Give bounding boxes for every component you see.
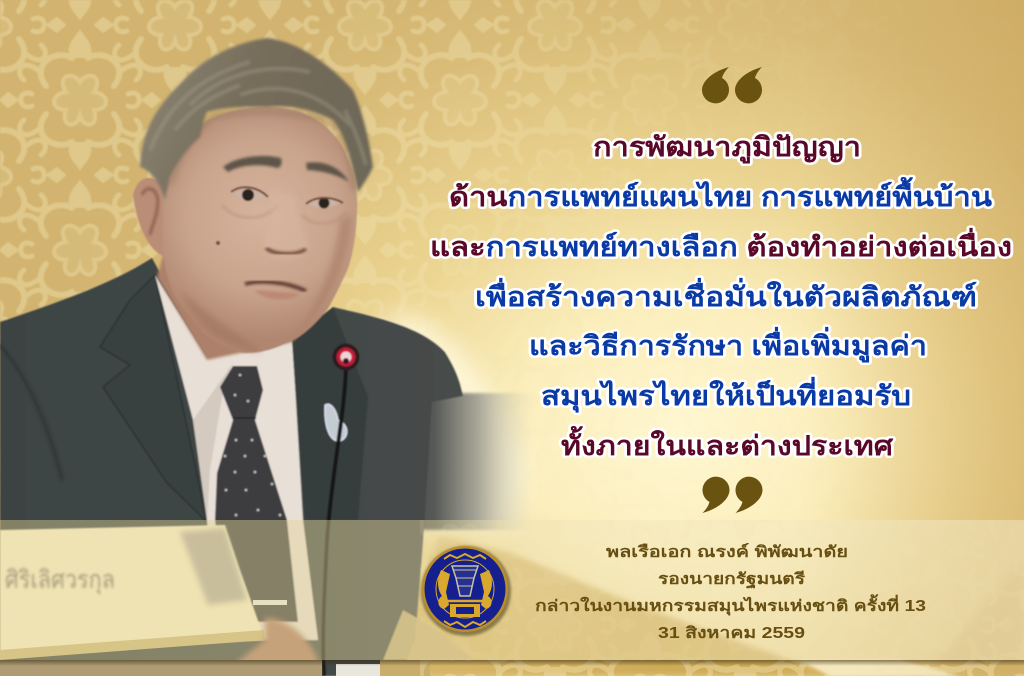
name card text: ศิริเลิศวรกุล — [5, 566, 115, 595]
strip beneath band — [0, 660, 1024, 676]
lower gold wedge behind band — [380, 535, 835, 676]
right eye — [306, 198, 343, 208]
lower right gold corner — [925, 560, 1024, 676]
caption text — [535, 543, 926, 642]
seal: rim ornaments — [444, 554, 486, 627]
speaker name: พลเรือเอก ณรงค์ พิพัฒนาดัย — [606, 543, 848, 561]
shirt — [155, 275, 318, 640]
nostril shadow — [266, 248, 306, 254]
line 5: และวิธีการรักษา เพื่อเพิ่มมูลค่า — [529, 326, 927, 363]
mole — [216, 241, 220, 245]
seal: central urn — [452, 566, 478, 596]
left eye — [231, 187, 268, 201]
date: 31 สิงหาคม 2559 — [658, 624, 805, 642]
left lapel — [100, 275, 207, 522]
hair strands — [150, 62, 366, 165]
line 1: การพัฒนาภูมิปัญญา — [593, 132, 861, 164]
right eye bag — [302, 212, 346, 224]
man in suit at meeting — [0, 38, 535, 676]
event: กล่าวในงานมหกรรมสมุนไพรแห่งชาติ ครั้งที่ 13 — [535, 594, 926, 616]
quote text — [430, 132, 1012, 461]
photo reflection — [180, 528, 247, 605]
microphone head — [332, 344, 360, 370]
right lapel — [292, 307, 368, 520]
face — [163, 107, 357, 353]
seal: base — [450, 604, 480, 617]
line 3: และ การแพทย์ทางเลือก ต้องทำอย่างต่อเนื่อง — [430, 227, 1012, 262]
speaker title: รองนายกรัฐมนตรี — [658, 570, 806, 589]
hairline shadow — [170, 112, 354, 190]
right cheek shading — [295, 215, 352, 335]
line 6: สมุนไพรไทยให้เป็นที่ยอมรับ — [541, 376, 911, 413]
left eyebrow — [223, 156, 282, 172]
podium corner — [383, 610, 475, 660]
caption band — [0, 520, 1024, 660]
microphone stalk — [323, 368, 346, 676]
hand on desk — [220, 618, 320, 676]
suit jacket — [0, 258, 463, 676]
line 2: ด้าน การแพทย์แผนไทย การแพทย์พื้นบ้าน — [449, 176, 993, 212]
line 4: เพื่อสร้างความเชื่อมั่นในตัวผลิตภัณฑ์ — [475, 277, 977, 312]
collar shade — [193, 363, 233, 520]
line 7: ทั้งภายในและต่างประเทศ — [561, 425, 894, 461]
pale lower streak — [800, 660, 960, 676]
right eyebrow — [306, 162, 349, 182]
white halo behind figure — [380, 310, 530, 530]
left eye bag — [222, 205, 278, 218]
jaw shading — [180, 290, 262, 352]
neck — [157, 248, 330, 360]
icon: government seal — [421, 546, 511, 636]
seal: lions — [438, 570, 492, 609]
icon: opening quotation mark — [702, 67, 762, 103]
lower lip — [254, 290, 300, 300]
lapel pin — [325, 404, 347, 441]
name card on desk — [0, 525, 265, 660]
pen on desk — [253, 600, 287, 605]
band damask texture — [420, 520, 1024, 676]
chair back — [410, 393, 535, 530]
necktie — [215, 366, 298, 622]
nose bridge shadow — [264, 190, 310, 259]
hair — [140, 38, 373, 200]
ear — [133, 178, 170, 258]
upper lip line — [245, 282, 306, 291]
sleeve crease — [0, 345, 62, 480]
icon: closing quotation mark — [702, 477, 762, 513]
